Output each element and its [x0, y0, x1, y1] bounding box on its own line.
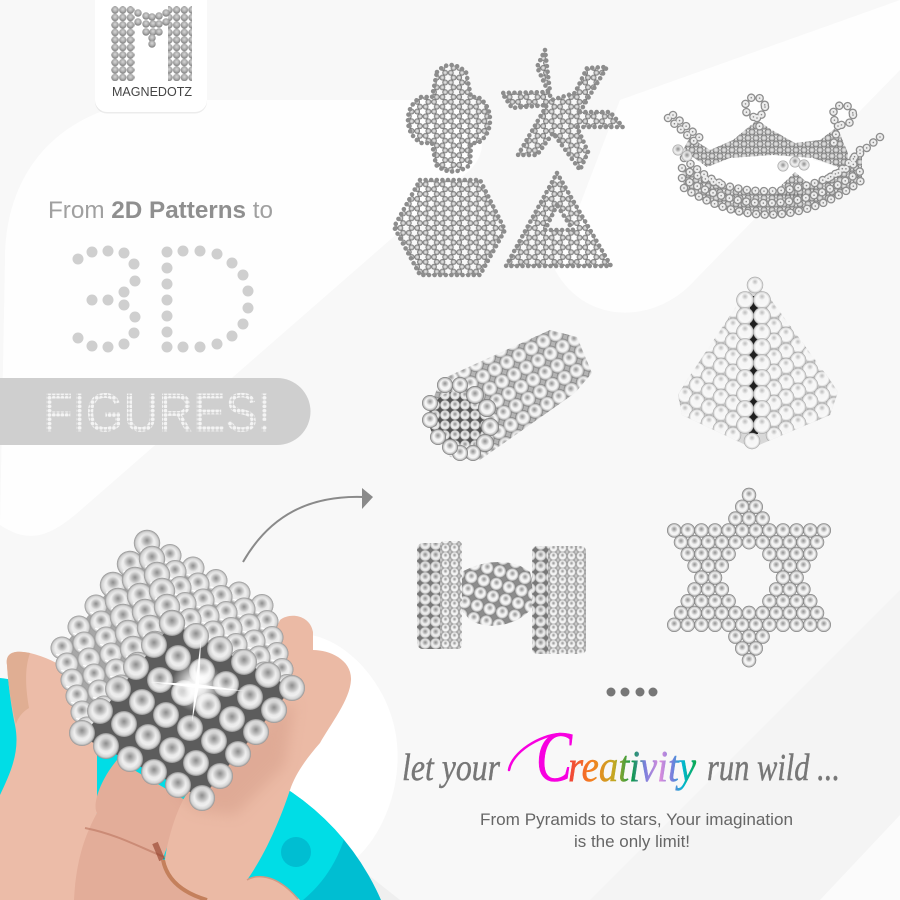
logo card: [95, 0, 207, 114]
cube: upper left face: [50, 530, 185, 740]
icon: 2D triangle pattern: [506, 173, 611, 266]
cyan backdrop shape: [0, 670, 381, 900]
magnetic ball cube: [50, 530, 305, 811]
cube: upper right face: [136, 532, 298, 697]
icon: ball bow-tie figure: [417, 541, 586, 654]
subtitle: is the only limit!: [574, 832, 690, 851]
icon: 2D pinwheel pattern: [502, 50, 623, 170]
dotted 3D lettering: [72, 246, 254, 352]
arrow: [243, 488, 373, 562]
icon: 2D hexagon pattern: [394, 180, 505, 275]
icon: 2D cross pattern: [408, 65, 490, 172]
pagination dots: [606, 688, 658, 696]
icon: ball star of David: [667, 488, 831, 667]
tagline: reativity: [568, 742, 696, 791]
icon: ball cylinder: [422, 330, 592, 461]
icon: magnetic ball crown: [668, 97, 880, 217]
icon: ball pyramid: [678, 276, 838, 450]
subtitle: [480, 810, 793, 851]
tagline: [402, 717, 840, 797]
tagline: run wild ...: [707, 747, 840, 789]
subtitle: From Pyramids to stars, Your imagination: [480, 810, 793, 829]
heading: from 2D patterns to: From 2D Patterns to: [48, 197, 273, 224]
tagline: C: [536, 717, 573, 797]
logo card: MAGNEDOTZ: [112, 85, 192, 99]
sparkle on the cube: [150, 640, 245, 722]
tagline: let your: [402, 747, 500, 789]
hand holding the cube: [0, 616, 351, 900]
cube: front lower face: [69, 610, 305, 811]
figures banner: FIGURES!: [43, 383, 271, 443]
